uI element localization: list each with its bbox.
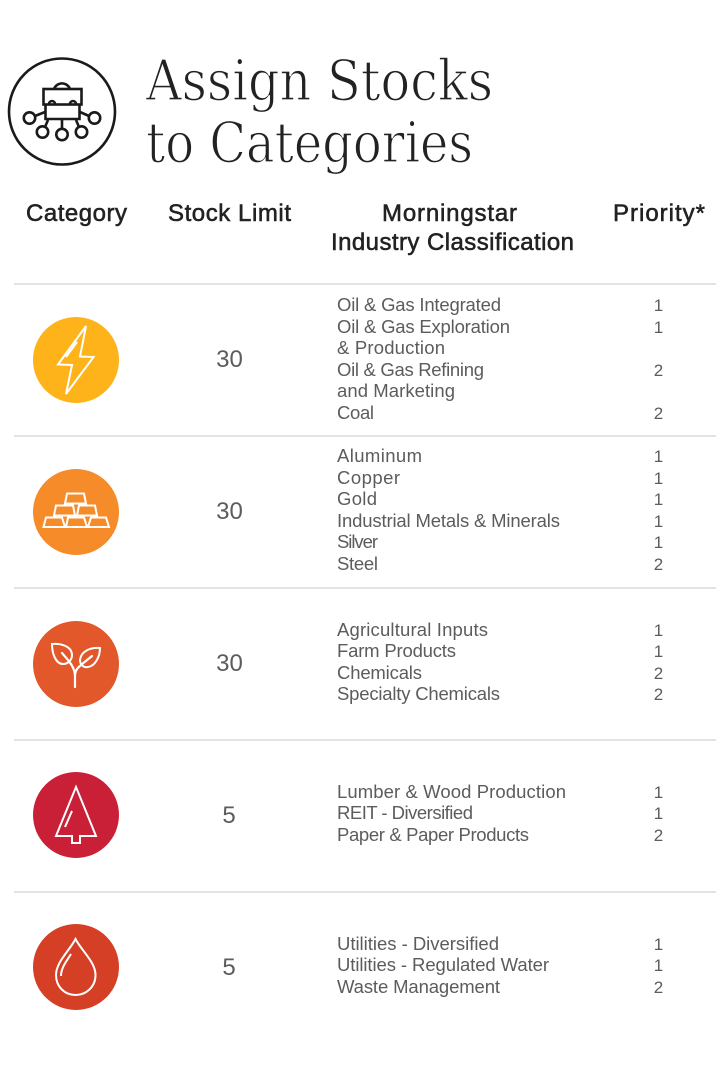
priorities: metals <box>654 447 663 574</box>
industries: metals: Silver <box>337 531 378 552</box>
industries: agriculture: Agricultural Inputs <box>337 619 488 640</box>
icon: water drop <box>33 924 119 1010</box>
industries: agriculture: Specialty Chemicals <box>337 683 500 704</box>
industries: water <box>337 933 549 997</box>
row: water <box>33 924 663 1010</box>
title <box>145 49 493 176</box>
priorities: energy: 2 <box>654 361 663 380</box>
column headings: Morningstar <box>382 200 517 227</box>
stock limit: 30: 30 <box>216 346 243 373</box>
priorities: metals: 1 <box>654 490 663 509</box>
icon: briefcase network <box>9 58 115 164</box>
icon: sprout <box>33 621 119 707</box>
industries: energy: and Marketing <box>337 380 455 401</box>
industries: metals: Copper <box>337 467 400 488</box>
industries: timber: Paper & Paper Products <box>337 824 529 845</box>
stock limit: 5: 5 <box>222 802 236 829</box>
industries: water: Waste Management <box>337 976 500 997</box>
row: metals <box>33 445 663 574</box>
title: to Categories <box>146 111 473 176</box>
priorities: agriculture: 2 <box>654 685 663 704</box>
column headings: Industry Classification <box>331 229 574 256</box>
priorities: energy <box>654 296 663 423</box>
column headings: Stock Limit <box>168 200 291 227</box>
icon: lightning bolt <box>33 317 119 403</box>
priorities: timber: 2 <box>654 826 663 845</box>
industries: energy: Oil & Gas Exploration <box>337 316 510 337</box>
stock limit: 30: 30 <box>216 498 243 525</box>
icon: tree <box>33 772 119 858</box>
industries: timber: REIT - Diversified <box>337 802 473 823</box>
priorities: energy: 1 <box>654 296 663 315</box>
industries: energy: Oil & Gas Integrated <box>337 294 501 315</box>
title: Assign Stocks <box>145 49 493 114</box>
industries: metals <box>337 445 560 574</box>
priorities: water: 1 <box>654 956 663 975</box>
priorities: metals: 1 <box>654 447 663 466</box>
row: timber <box>33 772 663 858</box>
industries: agriculture: Chemicals <box>337 662 422 683</box>
priorities: timber: 1 <box>654 783 663 802</box>
column headings: Priority* <box>613 200 705 227</box>
industries: water: Utilities - Regulated Water <box>337 954 549 975</box>
column headings <box>26 200 705 256</box>
icon: gold bars <box>33 469 119 555</box>
industries: metals: Industrial Metals & Minerals <box>337 510 560 531</box>
industries: timber: Lumber & Wood Production <box>337 781 566 802</box>
priorities: agriculture: 1 <box>654 642 663 661</box>
stock limit: 5: 5 <box>222 954 236 981</box>
industries: timber <box>337 781 566 845</box>
priorities: metals: 1 <box>654 512 663 531</box>
industries: energy: & Production <box>337 337 445 358</box>
priorities: water: 2 <box>654 978 663 997</box>
priorities: timber <box>654 783 663 845</box>
priorities: agriculture <box>654 621 663 704</box>
priorities: metals: 2 <box>654 555 663 574</box>
industries: water: Utilities - Diversified <box>337 933 499 954</box>
industries: metals: Steel <box>337 553 378 574</box>
priorities: timber: 1 <box>654 804 663 823</box>
industries: energy <box>337 294 510 423</box>
priorities: metals: 1 <box>654 469 663 488</box>
priorities: metals: 1 <box>654 533 663 552</box>
industries: metals: Gold <box>337 488 377 509</box>
industries: energy: Oil & Gas Refining <box>337 359 484 380</box>
priorities: energy: 2 <box>654 404 663 423</box>
priorities: water: 1 <box>654 935 663 954</box>
priorities: agriculture: 2 <box>654 664 663 683</box>
stock limit: 30: 30 <box>216 650 243 677</box>
priorities: energy: 1 <box>654 318 663 337</box>
industries: metals: Aluminum <box>337 445 422 466</box>
column headings: Category <box>26 200 127 227</box>
industries: energy: Coal <box>337 402 374 423</box>
row: energy <box>33 294 663 423</box>
row: agriculture <box>33 619 663 707</box>
industries: agriculture <box>337 619 500 704</box>
priorities: water <box>654 935 663 997</box>
priorities: agriculture: 1 <box>654 621 663 640</box>
industries: agriculture: Farm Products <box>337 640 456 661</box>
